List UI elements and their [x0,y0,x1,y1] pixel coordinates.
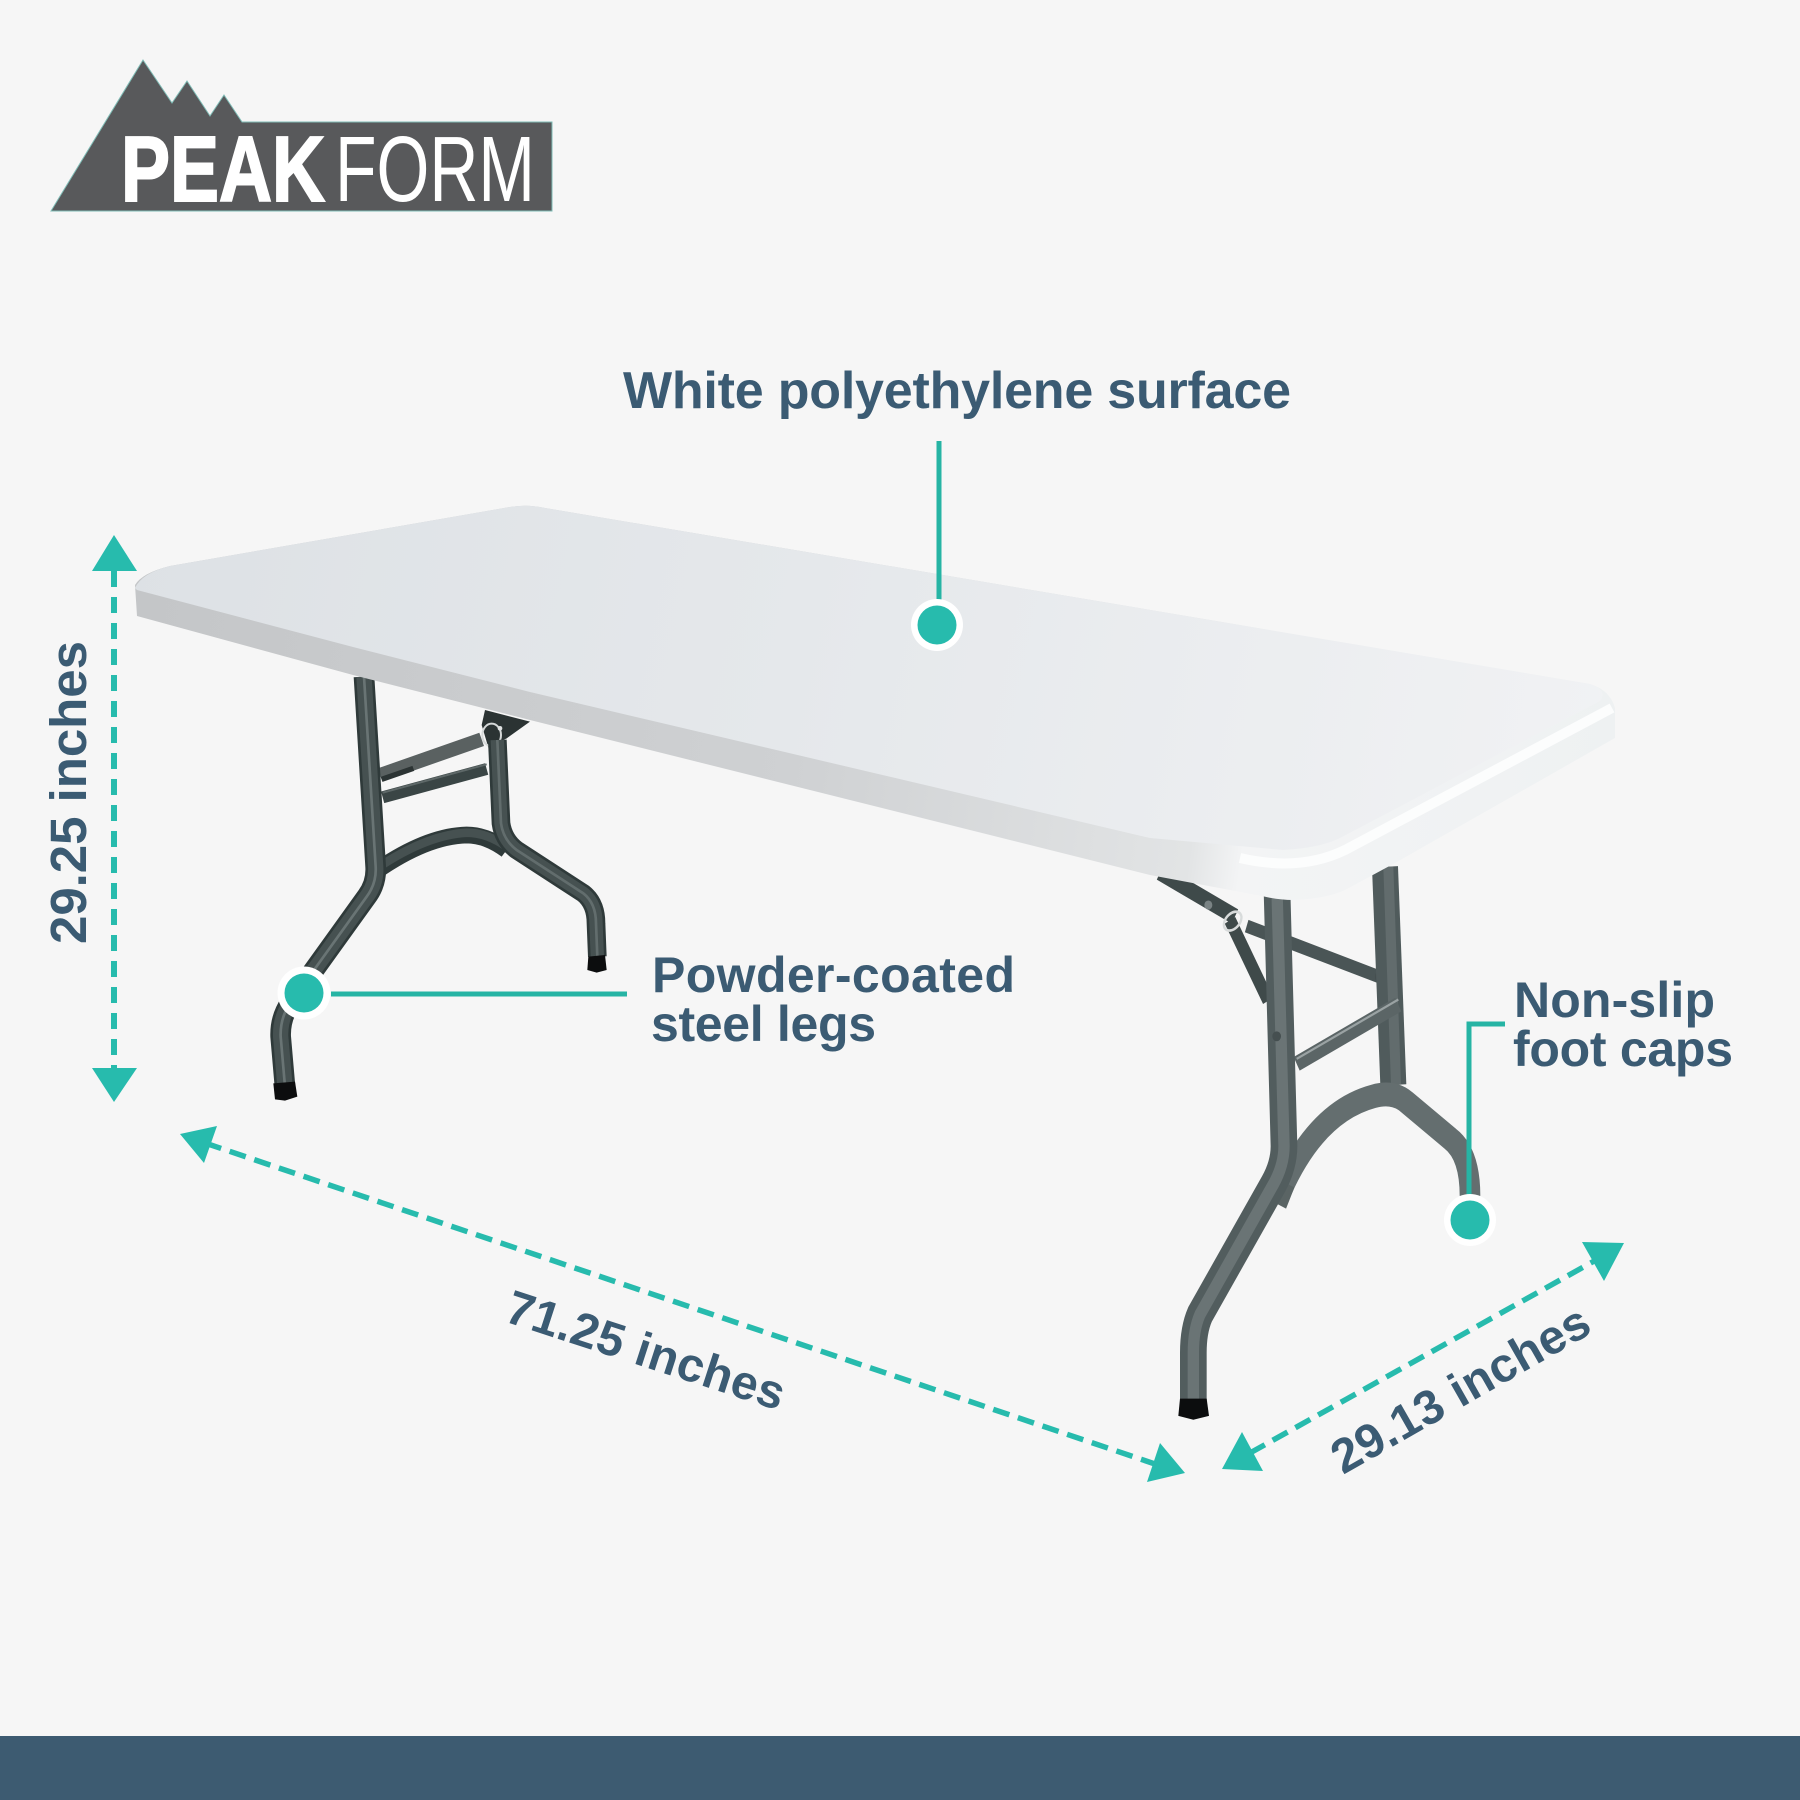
far table legs [273,677,607,1101]
near table legs [1160,867,1470,1420]
arrow: height [92,535,137,1102]
arrow: length [180,1126,1185,1482]
table top [135,506,1615,900]
callout: legs [278,966,627,1020]
label: legs: steel legs [651,996,876,1052]
label: foot caps [1513,972,1733,1077]
label: legs [651,947,1015,1052]
footer band [0,1736,1800,1800]
logo: PeakForm [51,60,552,221]
logo: PeakForm: FORM [335,117,535,221]
callout: surface [911,441,963,651]
label: legs: Powder-coated [652,947,1015,1003]
logo: PeakForm: PEAK [121,117,325,221]
label: height: 29.25 inches [40,641,97,944]
arrow: width [1222,1242,1624,1471]
callout: foot caps [1444,1024,1505,1246]
label: width: 29.13 inches [1322,1295,1599,1485]
label: foot caps: Non-slip [1514,972,1715,1028]
label: surface: White polyethylene surface [623,362,1291,420]
label: length: 71.25 inches [500,1281,792,1421]
label: foot caps: foot caps [1513,1021,1733,1077]
